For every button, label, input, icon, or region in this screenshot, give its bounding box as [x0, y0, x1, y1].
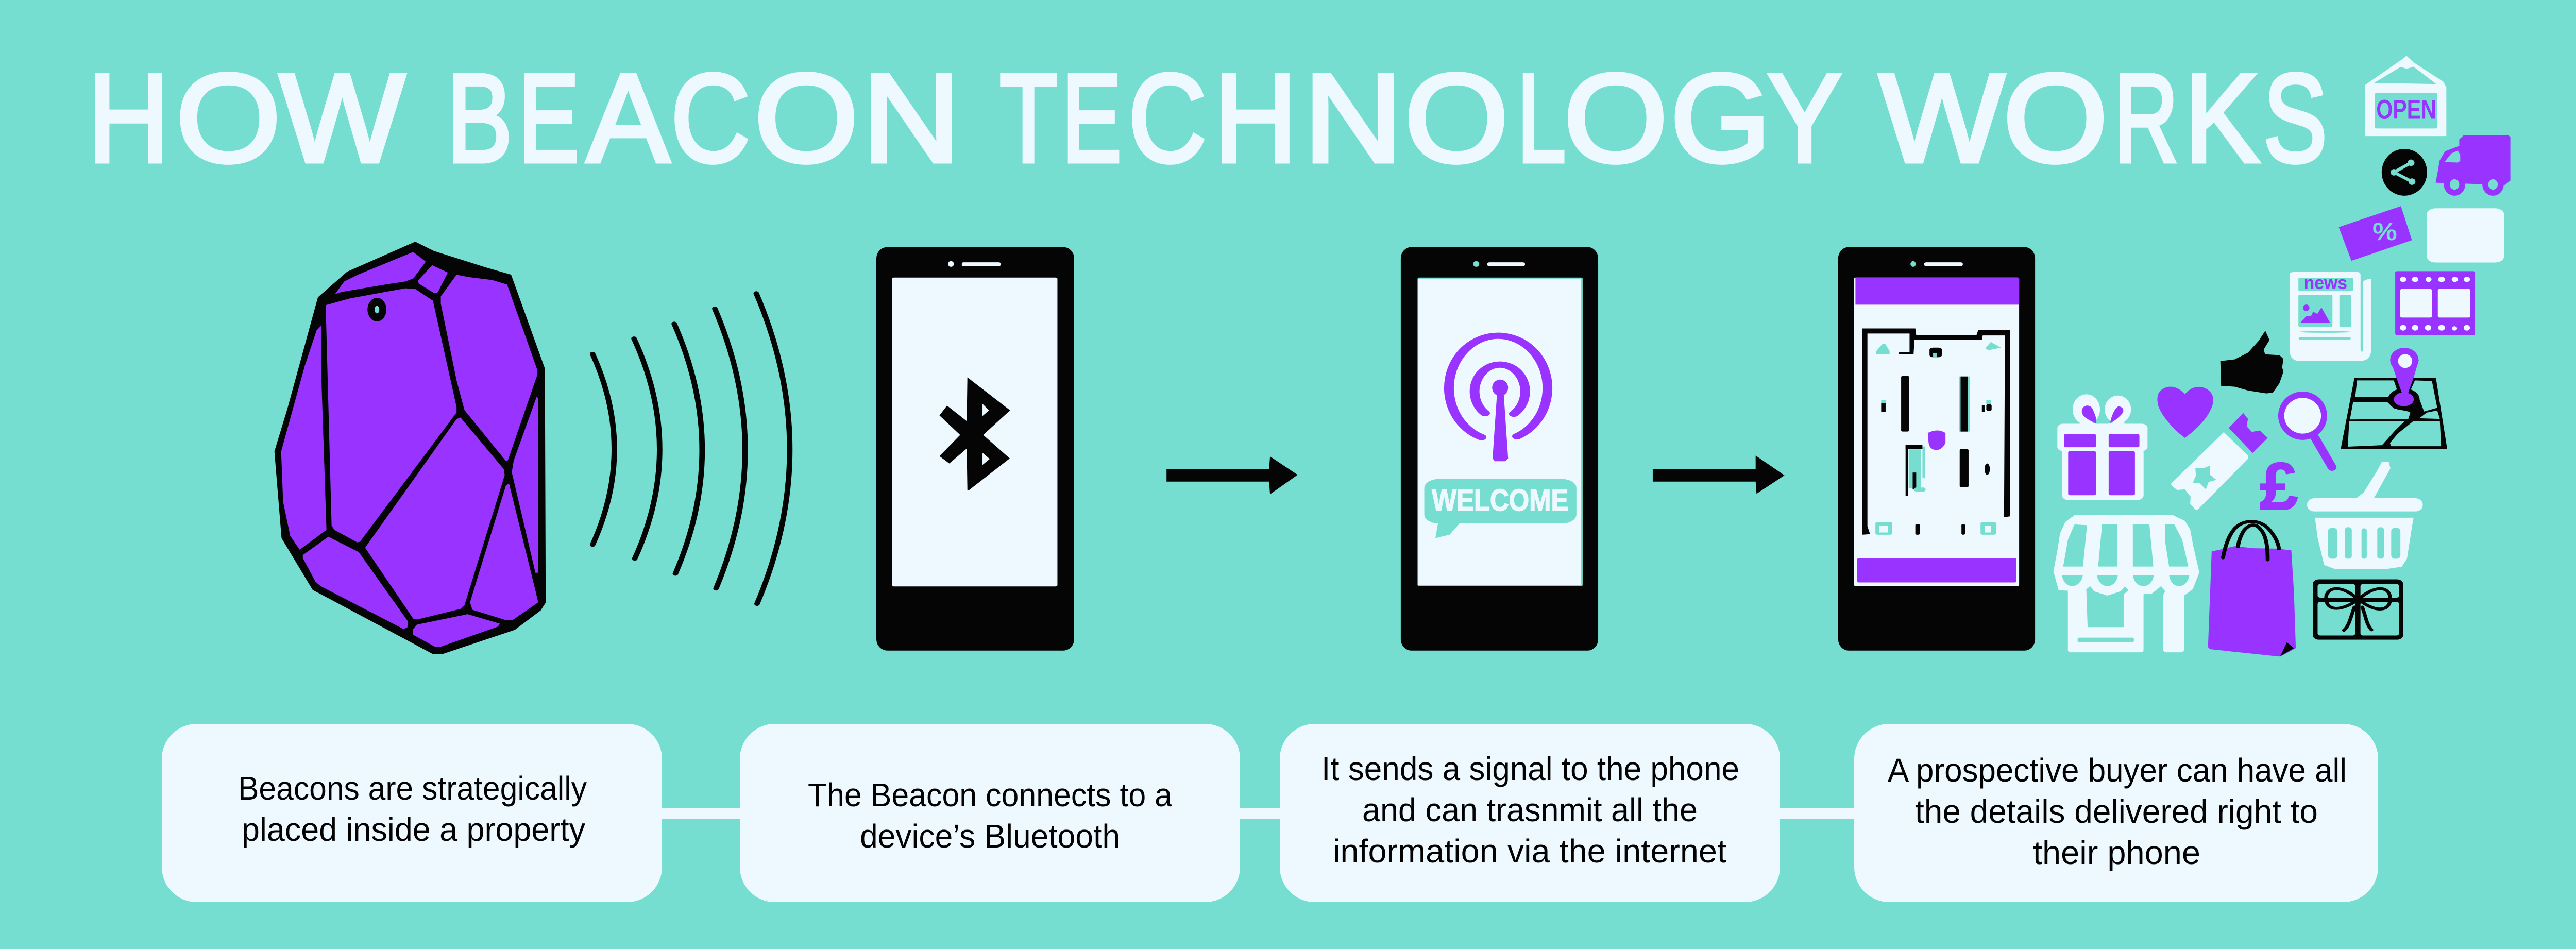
- title: N: [862, 47, 961, 189]
- icon: film strip: [2395, 271, 2475, 335]
- screen edge: [1418, 278, 1583, 586]
- title: O: [176, 47, 281, 189]
- phone body: [1401, 247, 1598, 651]
- icon: shop front: [2054, 515, 2199, 653]
- caption panel 4: the details delivered right to: [1915, 793, 2318, 830]
- phone: welcome signal: [1401, 247, 1598, 651]
- title: S: [2263, 47, 2327, 189]
- camera: [948, 261, 954, 267]
- title: W: [1879, 47, 2005, 189]
- caption panel 3: It sends a signal to the phone: [1321, 750, 1739, 787]
- phone body: [1838, 247, 2035, 651]
- title: E: [1062, 47, 1122, 189]
- title: O: [754, 47, 858, 189]
- title: N: [1303, 47, 1402, 189]
- icon cluster: retail symbols upper: [2290, 56, 2511, 361]
- title: A: [587, 47, 669, 189]
- icon: voucher ticket: [2171, 413, 2268, 510]
- icon: open sign: OPEN: [2376, 94, 2436, 125]
- title: C: [1128, 47, 1207, 189]
- icon: broadcast signal: [1449, 336, 1548, 461]
- icon: newspaper: news: [2304, 273, 2347, 293]
- icon: map with pin: [2341, 348, 2447, 449]
- icon: pound sign: £: [2260, 449, 2298, 524]
- caption panel 4: A prospective buyer can have all: [1888, 752, 2347, 789]
- title: K: [2185, 47, 2259, 189]
- title: H: [1214, 47, 1297, 189]
- icon: open sign: [2365, 56, 2446, 136]
- caption panel 3: [1280, 724, 1780, 902]
- icon: newspaper: [2290, 272, 2371, 361]
- title: O: [1404, 47, 1509, 189]
- speaker: [1487, 262, 1525, 266]
- eyelet hole: [375, 306, 379, 313]
- title: G: [1670, 47, 1771, 189]
- connector bar between caption boxes: [618, 808, 1906, 819]
- beacon facets: [281, 252, 538, 647]
- icon: heart: [2157, 387, 2213, 438]
- icon: discount tag: [2339, 206, 2412, 261]
- caption panel 3: information via the internet: [1333, 833, 1726, 870]
- phone body: [876, 247, 1074, 651]
- speaker: [962, 262, 1001, 266]
- phone screen: [892, 278, 1057, 586]
- caption panel 3: and can trasnmit all the: [1362, 791, 1698, 828]
- icon: bluetooth symbol: [939, 377, 1010, 490]
- title: B: [447, 47, 512, 189]
- title: E: [518, 47, 579, 189]
- store floor plan: [1862, 328, 2010, 535]
- icon cluster: retail symbols lower: [2054, 331, 2447, 656]
- title: Y: [1768, 47, 1840, 189]
- icon: delivery truck: [2435, 135, 2511, 196]
- camera: [1910, 261, 1916, 267]
- beacon eyelet: [367, 298, 386, 321]
- phone screen: [1854, 278, 2019, 586]
- beacon silhouette: [276, 243, 544, 653]
- icon: magnifying glass: [2278, 392, 2332, 467]
- top purple bar: [1855, 278, 2019, 304]
- icon: gift box white: [2057, 394, 2147, 500]
- icon: signal waves: [592, 293, 790, 604]
- icon: purple beacon gem: [276, 243, 544, 653]
- icon: shopping bag: [2208, 521, 2296, 656]
- caption panel 2: [740, 724, 1240, 902]
- icon: blank card: [2427, 208, 2504, 263]
- title: C: [671, 47, 750, 189]
- phone screen: [1418, 279, 1581, 585]
- title: W: [279, 47, 405, 189]
- arrow: welcome to floor plan: [1653, 455, 1785, 494]
- speaker: [1924, 262, 1963, 266]
- caption panel 4: [1854, 724, 2378, 902]
- bottom purple bar: [1857, 558, 2016, 583]
- icon: gift box outline: [2313, 580, 2403, 640]
- phone: bluetooth: [876, 247, 1074, 651]
- welcome speech bubble: [1425, 479, 1577, 538]
- title: T: [999, 47, 1057, 189]
- caption panel 4: their phone: [2033, 834, 2200, 871]
- title: O: [2003, 47, 2108, 189]
- icon: share button: [2382, 149, 2427, 196]
- icon: discount tag: %: [2372, 218, 2397, 246]
- camera: [1473, 261, 1479, 267]
- caption panel 2: device’s Bluetooth: [860, 818, 1120, 855]
- arrow: bluetooth to welcome: [1166, 456, 1298, 494]
- caption panel 1: [162, 724, 662, 902]
- icon: thumbs up: [2221, 331, 2283, 394]
- caption panel 1: Beacons are strategically: [238, 770, 587, 807]
- title: O: [1564, 47, 1668, 189]
- caption panel 1: placed inside a property: [242, 811, 585, 848]
- title: L: [1517, 47, 1566, 189]
- title: H: [88, 47, 170, 189]
- welcome speech bubble: WELCOME: [1432, 483, 1568, 517]
- title: R: [2114, 47, 2178, 189]
- caption panel 2: The Beacon connects to a: [808, 776, 1172, 814]
- phone: floor plan: [1838, 247, 2035, 651]
- icon: shopping basket: [2307, 462, 2423, 569]
